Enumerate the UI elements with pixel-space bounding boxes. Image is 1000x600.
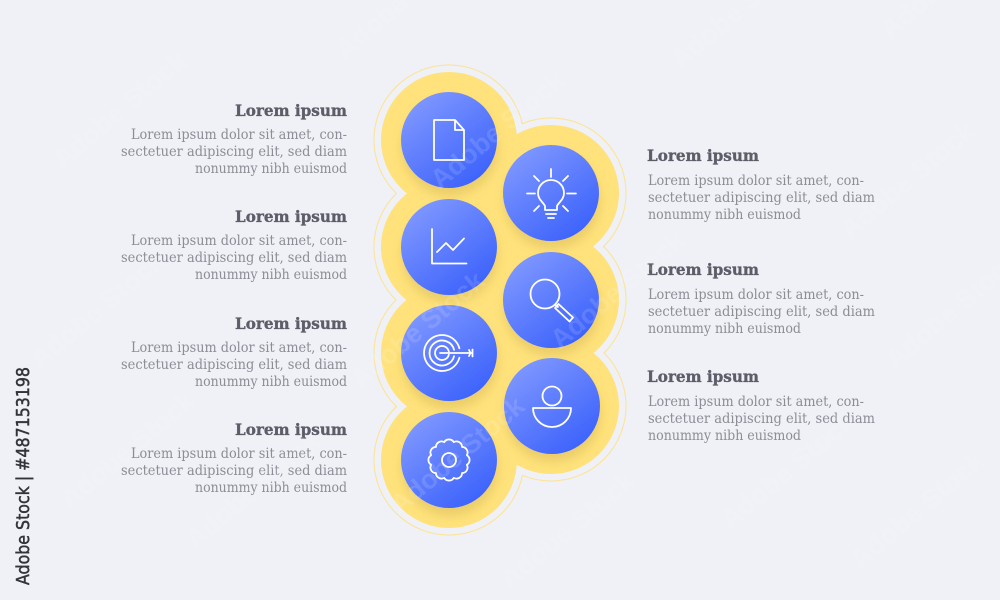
left text block 4: nonummy nibh euismod: [195, 480, 347, 496]
left text block 4: sectetuer adipiscing elit, sed diam: [121, 463, 347, 479]
right text block 2: nonummy nibh euismod: [648, 321, 801, 337]
left text block 3: Lorem ipsum: [235, 314, 347, 333]
icon circle: line chart: [401, 199, 497, 295]
left text block 2: sectetuer adipiscing elit, sed diam: [121, 250, 347, 266]
left text block 3: [121, 314, 347, 390]
left text block 1: Lorem ipsum dolor sit amet, con-: [131, 127, 347, 143]
stock id caption: Adobe Stock | #487153198: [13, 367, 34, 585]
icon circle: document: [401, 92, 497, 188]
watermark pattern: Adobe Stock: [47, 45, 193, 175]
watermark pattern: Adobe Stock: [55, 385, 201, 515]
right text block 1: Lorem ipsum dolor sit amet, con-: [648, 173, 864, 189]
right text block 2: Lorem ipsum dolor sit amet, con-: [648, 287, 864, 303]
icon circle: gear: [401, 412, 497, 508]
watermark pattern: Adobe Stock: [715, 405, 861, 535]
icon circle: light bulb: [503, 145, 599, 241]
left text block 2: Lorem ipsum dolor sit amet, con-: [131, 233, 347, 249]
watermark pattern: Adobe Stock: [495, 465, 641, 595]
watermark pattern: Adobe Stock: [25, 245, 171, 375]
icon circle: person: [504, 358, 600, 454]
yellow blob cluster with outline: [374, 65, 626, 535]
right text block 2: [647, 260, 875, 337]
left text block 2: [121, 207, 347, 283]
left text block 4: Lorem ipsum dolor sit amet, con-: [131, 446, 347, 462]
watermark pattern: Adobe Stock: [545, 225, 691, 355]
right text block 1: nonummy nibh euismod: [648, 207, 801, 223]
left text block 3: sectetuer adipiscing elit, sed diam: [121, 357, 347, 373]
right text block 3: Lorem ipsum dolor sit amet, con-: [648, 394, 864, 410]
left text block 1: [121, 101, 347, 177]
left text block 1: sectetuer adipiscing elit, sed diam: [121, 144, 347, 160]
left text block 3: nonummy nibh euismod: [195, 374, 347, 390]
right text block 1: sectetuer adipiscing elit, sed diam: [648, 190, 875, 206]
watermark pattern: Adobe Stock: [180, 425, 326, 555]
icon circle: target: [401, 305, 497, 401]
right text block 3: nonummy nibh euismod: [648, 428, 801, 444]
right text block 2: sectetuer adipiscing elit, sed diam: [648, 304, 875, 320]
icon circle: magnifier: [503, 252, 599, 348]
right text block 3: Lorem ipsum: [647, 367, 759, 386]
left text block 2: nonummy nibh euismod: [195, 267, 347, 283]
watermark pattern: Adobe Stock: [425, 65, 571, 195]
right text block 1: Lorem ipsum: [647, 146, 759, 165]
right text block 2: Lorem ipsum: [647, 260, 759, 279]
left text block 2: Lorem ipsum: [235, 207, 347, 226]
watermark pattern: Adobe Stock: [845, 445, 991, 575]
watermark pattern: Adobe Stock: [345, 265, 491, 395]
right text block 3: sectetuer adipiscing elit, sed diam: [648, 411, 875, 427]
right text block 3: [647, 367, 875, 444]
watermark pattern: Adobe Stock: [835, 115, 981, 245]
left text block 1: Lorem ipsum: [235, 101, 347, 120]
right text block 1: [647, 146, 875, 223]
watermark pattern: Adobe Stock: [385, 390, 531, 520]
left text block 4: Lorem ipsum: [235, 420, 347, 439]
left text block 3: Lorem ipsum dolor sit amet, con-: [131, 340, 347, 356]
left text block 4: [121, 420, 347, 496]
left text block 1: nonummy nibh euismod: [195, 161, 347, 177]
